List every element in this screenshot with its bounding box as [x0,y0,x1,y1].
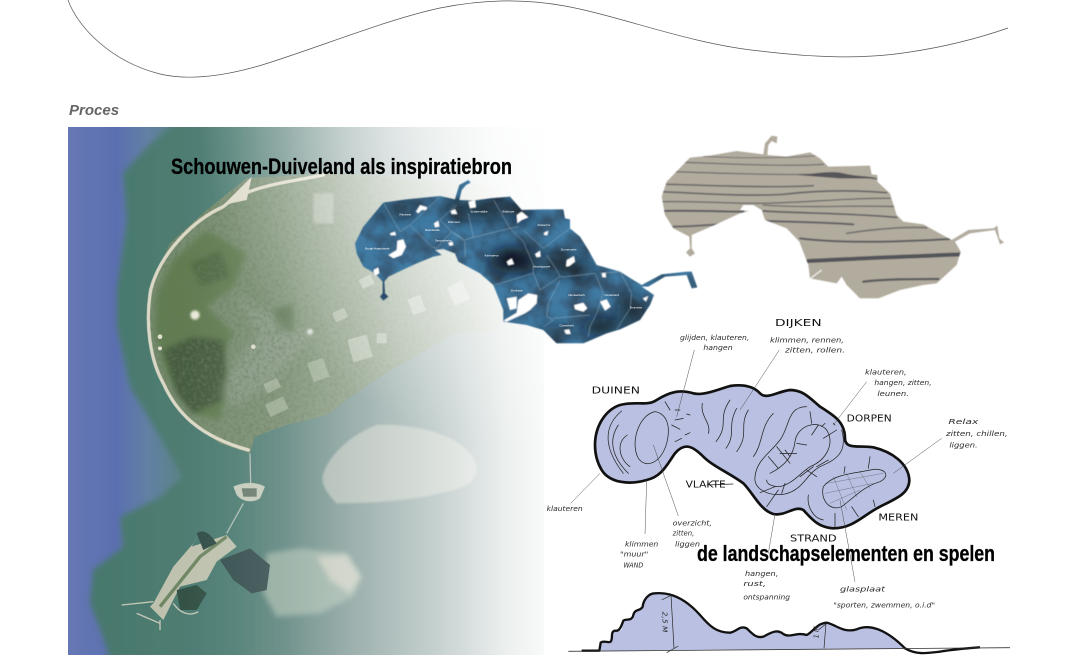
title: Schouwen-Duiveland als inspiratiebron: Schouwen-Duiveland als inspiratiebron [171,154,512,179]
island outline [595,385,909,528]
activity notes: WAND [623,562,644,570]
satellite photo [68,120,560,660]
activity notes: glasplaat [840,586,885,594]
municipality borders [383,197,632,337]
place names: Ellemeet [448,220,460,224]
icon: tidal flats [322,425,477,503]
map: blue municipality map [340,173,707,350]
landscape captions: DIJKEN [775,318,822,329]
place names: Renesse [399,213,412,217]
place names: Burgh-Haamstede [365,246,390,250]
landscape captions: DUINEN [592,385,640,396]
activity notes: klauteren [547,505,583,513]
activity notes: "muur" [620,551,648,559]
place names: Serooskerke [435,238,452,242]
place names: Kerkwerve [485,254,499,258]
activity notes: liggen [675,541,700,549]
icon: causeway and work island [227,453,265,533]
activity notes: Relax [948,418,980,426]
place names: Scharendijke [470,210,488,214]
dark mottling [377,200,668,342]
place names: Bruinisse [630,306,642,310]
activity notes: klauteren, [865,368,907,376]
cross-section profile [568,593,1010,653]
place names: Noordgouwe [533,264,550,268]
activity notes: zitten, rollen. [784,347,845,355]
activity notes: hangen, [745,570,778,578]
activity notes: zitten, chillen, [945,430,1008,438]
landscape captions [592,318,918,545]
cross-section profile: 2,5 M [661,612,670,633]
activity notes: "sporten, zwemmen, o.i.d" [833,602,935,610]
place names: Oosterland [604,293,619,297]
activity notes: leunen. [877,390,909,398]
activity notes: klimmen, rennen, [770,337,844,345]
activity notes: overzicht, [673,519,712,527]
landscape captions: DORPEN [847,414,892,425]
place names: Zierikzee [511,288,523,292]
icon: beach arc [148,175,323,450]
landscape captions: STRAND [790,534,837,545]
place names: Nieuwerkerk [568,293,585,297]
activity notes: zitten, [672,530,694,538]
landscape captions: VLAKTE [686,479,726,490]
place names: Zonnemaire [561,248,577,252]
place names: Noordwelle [425,228,440,232]
activity notes [547,334,1008,610]
leader lines [571,350,942,582]
dune and town patches [373,200,648,334]
landscape captions: MEREN [878,513,918,524]
activity notes: klimmen [625,541,658,549]
map: sand texture island [661,135,1004,299]
place names: Ouwerkerk [559,323,574,327]
place names: Dreischor [538,223,550,227]
heading: Proces: Proces [69,102,119,119]
cross-section profile: 1 M [812,626,820,638]
title: de landschapselementen en spelen: de landschapselementen en spelen [697,541,995,566]
top wave line [68,0,1008,77]
activity notes: ontspanning [743,593,791,601]
contour lines [608,400,886,527]
activity notes: rust, [743,580,766,588]
activity notes: glijden, klauteren, [680,334,749,342]
sketch: landscape elements [547,318,1010,653]
icon: land Schouwen [146,173,464,454]
activity notes: hangen [703,344,733,352]
place names: Brijdorpe [502,210,515,214]
activity notes: hangen, zitten, [874,379,932,387]
icon: lower island [122,528,362,630]
activity notes: liggen. [949,441,978,449]
place names [365,210,642,327]
